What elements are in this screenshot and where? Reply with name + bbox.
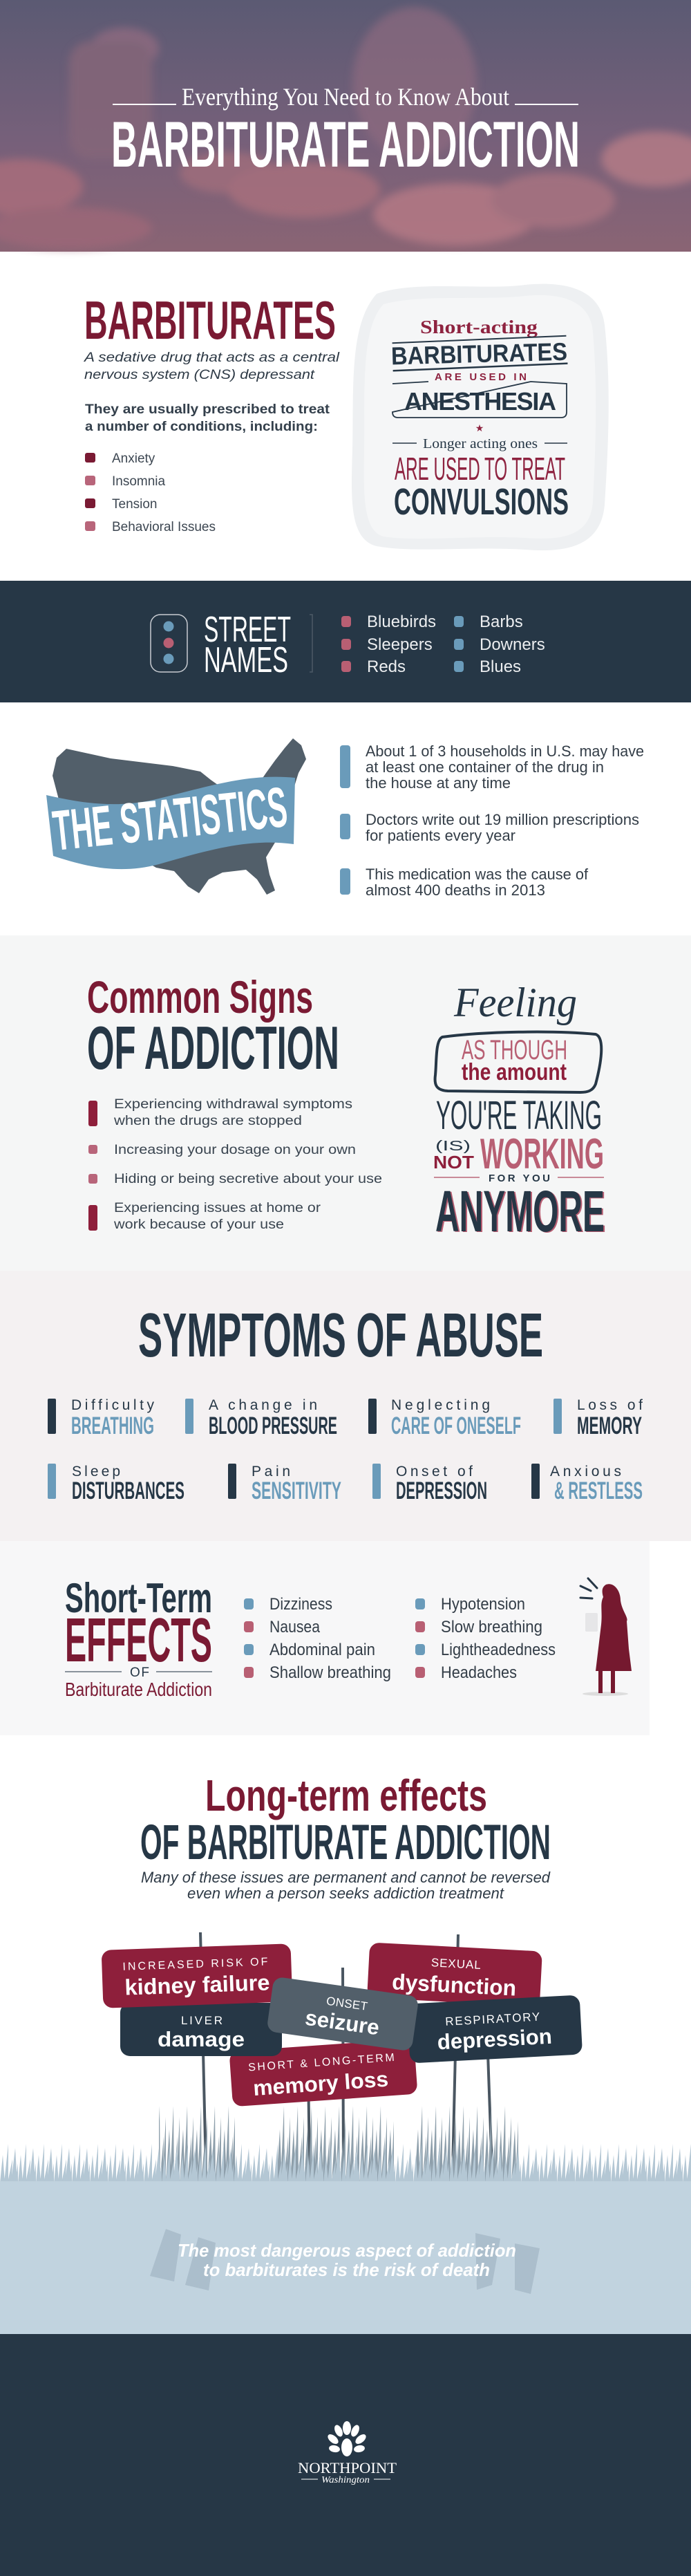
panel: street names [0, 581, 691, 702]
list: street names: Blues [480, 657, 521, 676]
list: street names: Reds [367, 657, 406, 676]
list: statistics: at least one container of the drug in [366, 758, 604, 776]
sign: liver damage: LIVER [181, 2014, 223, 2027]
symptoms row 2 [48, 1464, 643, 1504]
symptoms row 1: Loss of [577, 1397, 643, 1413]
list: street names: Sleepers [367, 635, 433, 654]
list: short-term effects: Nausea [269, 1618, 321, 1636]
sign: sexual dysfunction: dysfunction [391, 1969, 517, 2001]
sign: liver damage [120, 2003, 282, 2056]
icon: star: ★ [475, 422, 484, 433]
text: quote [178, 2240, 516, 2280]
icon: quote marks [150, 2229, 540, 2294]
sign: respiratory depression: depression [437, 2024, 553, 2054]
list: statistics: for patients every year [366, 827, 515, 844]
sign: liver damage: damage [158, 2027, 245, 2051]
symptoms row 2: DISTURBANCES [72, 1477, 184, 1504]
quote: feeling as though: (IS) [435, 1139, 471, 1154]
text: prescribed for: They are usually prescribed to treat [85, 402, 330, 417]
quote: feeling as though [433, 980, 606, 1244]
list: statistics: Doctors write out 19 million prescriptions [366, 811, 639, 828]
text: are used in: ARE USED IN [435, 371, 527, 383]
icon: worried woman [580, 1578, 632, 1696]
symptoms row 1 [48, 1397, 643, 1439]
box: anesthesia: ANESTHESIA [404, 387, 556, 416]
list: statistics: About 1 of 3 households in U.S. may have [366, 743, 644, 760]
panel: long-term effects [0, 1771, 691, 2183]
symptoms row 2: Onset of [396, 1464, 473, 1480]
list: short-term effects: Lightheadedness [441, 1641, 556, 1659]
quote: feeling as though: Feeling [453, 980, 577, 1025]
quote: feeling as though: AS THOUGH [462, 1035, 567, 1065]
symptoms row 1: A change in [209, 1397, 317, 1413]
text: quote: The most dangerous aspect of addiction [178, 2240, 516, 2261]
text: definition: nervous system (CNS) depressant [84, 368, 315, 382]
heading: short-term effects: Barbiturate Addiction [65, 1679, 212, 1700]
text: prescribed for: a number of conditions, including: [85, 420, 318, 434]
icon: pill indicator [151, 615, 187, 672]
list: short-term effects: Abdominal pain [269, 1641, 375, 1659]
heading: barbiturates: BARBITURATES [84, 290, 336, 351]
quote: feeling as though: WORKING [480, 1130, 604, 1178]
heading: short-term effects: Short-Term [65, 1575, 212, 1621]
symptoms row 1: Difficulty [71, 1397, 155, 1413]
panel: statistics [46, 738, 644, 899]
text: barbiturates: BARBITURATES [391, 337, 568, 370]
symptoms row 1: CARE OF ONESELF [391, 1412, 521, 1439]
text: short-acting: Short-acting [420, 317, 538, 337]
heading: common signs: Common Signs [87, 971, 313, 1023]
symptoms row 1: MEMORY [577, 1412, 642, 1439]
list: statistics [340, 743, 644, 899]
list: conditions: Insomnia [112, 474, 166, 489]
quote: feeling as though: NOT [433, 1152, 474, 1173]
list: short-term effects [244, 1595, 556, 1682]
sign: memory loss: memory loss [252, 2067, 389, 2100]
text: quote: to barbiturates is the risk of death [203, 2259, 490, 2280]
text: subtitle: Many of these issues are permanent and cannot be reversed [141, 1869, 551, 1886]
text: definition: A sedative drug that acts as a central [84, 351, 340, 365]
quote: feeling as though: FOR YOU [489, 1173, 550, 1184]
panel: barbiturates intro [84, 290, 340, 534]
list: short-term effects: Dizziness [269, 1595, 332, 1614]
list: conditions: Anxiety [112, 451, 155, 466]
sign: onset seizure [266, 1977, 419, 2051]
sign: memory loss: SHORT & LONG-TERM [248, 2052, 395, 2074]
sign: sexual dysfunction [367, 1943, 542, 2006]
footer [0, 2334, 691, 2576]
list: conditions: Tension [112, 497, 158, 512]
symptoms row 2: DEPRESSION [396, 1477, 487, 1504]
symptoms row 2: Sleep [72, 1464, 120, 1480]
list: signs: Experiencing issues at home or [114, 1201, 321, 1215]
sign: respiratory depression: RESPIRATORY [445, 2010, 540, 2028]
heading: long-term effects: Long-term effects [205, 1771, 487, 1820]
sign: onset seizure: seizure [303, 2006, 381, 2040]
panel: short-term effects [0, 1541, 650, 1735]
list: signs: Hiding or being secretive about your use [114, 1172, 382, 1186]
grass [0, 2102, 691, 2183]
heading: short-term effects: EFFECTS [65, 1606, 212, 1675]
logo: northpoint washington: NORTHPOINT [298, 2459, 397, 2476]
symptoms row 2: Anxious [550, 1464, 621, 1480]
text: definition [84, 351, 340, 382]
list: signs: when the drugs are stopped [113, 1114, 302, 1128]
text: subtitle [141, 1869, 551, 1902]
text: prescribed for [85, 402, 330, 434]
box: anesthesia [392, 382, 567, 418]
heading: street names [204, 610, 291, 680]
list: statistics: This medication was the cause of [366, 866, 589, 883]
logo: northpoint washington [298, 2421, 397, 2485]
sign: kidney failure: INCREASED RISK OF [122, 1956, 268, 1973]
list: street names [341, 613, 545, 676]
text: subtitle: even when a person seeks addiction treatment [187, 1885, 504, 1902]
heading: short-term effects [65, 1575, 212, 1700]
symptoms row 1: BREATHING [71, 1412, 154, 1439]
logo: northpoint washington: Washington [321, 2475, 370, 2485]
quote: feeling as though: the amount [462, 1059, 567, 1085]
symptoms row 1: Neglecting [391, 1397, 490, 1413]
panel: quote [0, 2181, 691, 2334]
symptoms row 1: BLOOD PRESSURE [209, 1412, 337, 1439]
list: short-term effects: Slow breathing [441, 1618, 542, 1636]
heading: short-term effects: OF [130, 1665, 149, 1680]
list: short-term effects: Headaches [441, 1663, 517, 1682]
list: short-term effects: Hypotension [441, 1595, 525, 1614]
list: signs: Experiencing withdrawal symptoms [114, 1097, 352, 1112]
heading: street names: NAMES [204, 640, 288, 680]
heading: of addiction: OF ADDICTION [87, 1014, 339, 1082]
list: statistics: the house at any time [366, 774, 511, 792]
text: convulsions: CONVULSIONS [394, 481, 569, 523]
card: short vs long acting [352, 284, 609, 550]
list: conditions [85, 451, 216, 534]
sign: memory loss [229, 2039, 417, 2107]
list: conditions: Behavioral Issues [112, 520, 216, 534]
text: longer acting ones: Longer acting ones [423, 436, 538, 451]
list: street names: Downers [480, 635, 545, 654]
sign: sexual dysfunction: SEXUAL [430, 1956, 481, 1972]
panel: symptoms of abuse [0, 1271, 691, 1541]
sign: respiratory depression [407, 1995, 583, 2063]
list: signs: work because of your use [113, 1217, 284, 1232]
list: short-term effects: Shallow breathing [269, 1663, 391, 1682]
icon: US map with banner: THE STATISTICS [50, 776, 290, 863]
header banner [0, 0, 691, 252]
sign posts [200, 1932, 492, 2171]
sign: onset seizure: ONSET [325, 1995, 368, 2013]
heading: street names: STREET [204, 610, 291, 650]
list: statistics: almost 400 deaths in 2013 [366, 881, 545, 899]
list: signs: Increasing your dosage on your own [114, 1143, 356, 1157]
header subtitle: Everything You Need to Know About [182, 83, 509, 111]
list: signs [88, 1097, 382, 1232]
sign: kidney failure [102, 1943, 292, 2008]
list: street names: Barbs [480, 613, 523, 631]
list: street names: Bluebirds [367, 613, 436, 631]
panel: common signs of addiction [0, 935, 691, 1271]
sign: kidney failure: kidney failure [124, 1970, 270, 2000]
symptoms row 2: SENSITIVITY [252, 1477, 341, 1504]
symptoms row 2: Pain [252, 1464, 290, 1480]
icon: US map with banner [46, 738, 306, 895]
